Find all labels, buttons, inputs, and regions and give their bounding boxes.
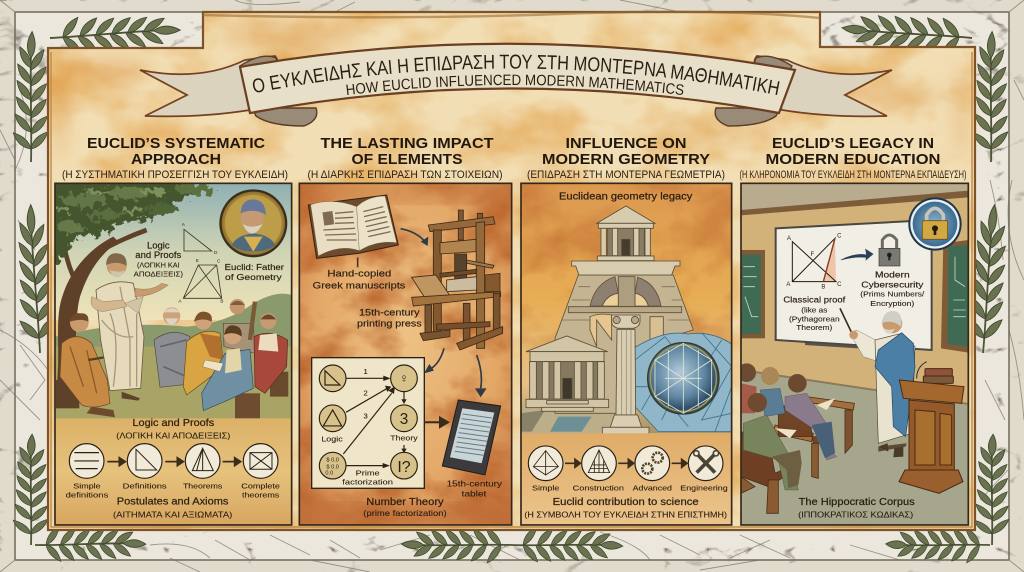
- subheading: postulates and axioms: [113, 497, 232, 519]
- arrow: proof to cybersecurity: [841, 249, 873, 260]
- icon: pyramid: [528, 446, 563, 481]
- flow diagram: simple to engineering: [528, 446, 728, 493]
- flow diagram: definitions to theorems: definitions: [66, 491, 109, 500]
- label: tablet: [447, 480, 502, 496]
- heading: lasting impact of Elements: (Η ΔΙΑΡΚΗΣ ΕΠΙΔΡΑΣΗ ΤΩΝ ΣΤΟΙΧΕΙΩΝ): [308, 169, 502, 181]
- number theory diagram box: 3: [364, 412, 368, 421]
- student desks and chairs: [741, 397, 854, 513]
- number theory diagram box: 1: [364, 367, 368, 376]
- number theory diagram box: 0.0: [325, 471, 333, 477]
- ribbon folds: [240, 56, 792, 126]
- subheading: logic and proofs: (ΛΟΓΙΚΗ ΚΑΙ ΑΠΟΔΕΙΞΕΙΣ): [116, 430, 230, 440]
- icon: gears: [635, 446, 670, 481]
- ribbon main band: [240, 44, 795, 113]
- heading: influence on modern geometry: INFLUENCE ON: [566, 135, 686, 152]
- arrow: [107, 458, 125, 466]
- whiteboard: [776, 220, 932, 350]
- geometry sketch: triangle and quadrilateral: [178, 222, 224, 303]
- subheading: contribution to science: [524, 497, 727, 519]
- heading: legacy in modern education: [740, 135, 966, 181]
- seated elder in grey: [154, 307, 191, 387]
- Euclid standing figure: [91, 253, 168, 401]
- label: tablet: 15th-century: [447, 479, 503, 489]
- stone pyramid structure: [555, 275, 693, 413]
- label: Hippocratic Corpus: (ΙΠΠΟΚΡΑΤΙΚΟΣ ΚΩΔΙΚΑΣ): [798, 510, 914, 519]
- number theory diagram box: ♀: [399, 372, 409, 386]
- number theory diagram box: 2: [364, 388, 368, 397]
- heading: influence on modern geometry: MODERN GEOMETRY: [542, 151, 710, 168]
- panel: lasting impact of Elements: [299, 183, 512, 525]
- arrow: [618, 459, 634, 467]
- geometry sketch: triangle and quadrilateral: A: [178, 298, 182, 303]
- arrow head: [475, 388, 487, 397]
- arrow: press to tablet: [477, 355, 481, 388]
- flow diagram: definitions to theorems: theorems: [242, 491, 280, 500]
- arrow head: [424, 364, 434, 373]
- proof diagram: A: [786, 282, 790, 288]
- seated student in red: [254, 313, 288, 397]
- central ionic column: [602, 315, 649, 437]
- heading: influence on modern geometry: (ΕΠΙΔΡΑΣΗ ΣΤΗ ΜΟΝΤΕΡΝΑ ΓΕΩΜΕΤΡΙΑ): [527, 169, 725, 181]
- icon: printing press: [412, 210, 503, 350]
- flow diagram: simple to engineering: Advanced: [633, 484, 672, 493]
- label: Euclidean geometry legacy: Euclidean geometry legacy: [559, 191, 692, 202]
- heading: Euclid's systematic approach: (Η ΣΥΣΤΗΜΑΤΙΚΗ ΠΡΟΣΕΓΓΙΣΗ ΤΟΥ ΕΥΚΛΕΙΔΗ): [62, 169, 288, 181]
- number theory diagram box: Logic: [321, 435, 343, 444]
- proof diagram: [786, 233, 842, 291]
- icon: Euclid portrait medallion: [219, 189, 287, 257]
- label: classical proof: (like as: [801, 306, 828, 315]
- olive branch: left side: [9, 203, 59, 354]
- proof diagram: A: [787, 236, 791, 242]
- label: number theory: [363, 497, 447, 518]
- left chalkboard: [738, 250, 765, 338]
- olive branch: bottom centre right: [512, 525, 623, 564]
- number theory diagram box: 3: [400, 411, 408, 428]
- banner title: Ο ΕΥΚΛΕΙΔΗΣ ΚΑΙ Η ΕΠΙΔΡΑΣΗ ΤΟΥ ΣΤΗ ΜΟΝΤΕΡΝΑ ΜΑΘΗΜΑΤΙΚΗ: [252, 54, 780, 95]
- label: classical proof: Classical proof: [783, 295, 846, 305]
- number theory diagram box: Prime: [356, 469, 380, 478]
- arrow: manuscript to press: [401, 229, 425, 242]
- label: printing press: [357, 307, 422, 329]
- arrow: press to number theory: [430, 348, 444, 369]
- arrow: [223, 458, 241, 466]
- icon: right triangle: [127, 444, 162, 478]
- banner subtitle: HOW EUCLID INFLUENCED MODERN MATHEMATICS: [346, 74, 684, 95]
- panel: Euclid teaching scene: [50, 180, 292, 525]
- label: number theory: Number Theory: [366, 497, 445, 508]
- subheading: postulates and axioms: Postulates and Axioms: [117, 497, 228, 508]
- lower left temple: [526, 336, 609, 411]
- label: hand-copied manuscripts: [313, 269, 406, 290]
- heading: influence on modern geometry: [527, 135, 725, 181]
- label: modern cybersecurity: (Prims Numbers/: [860, 292, 924, 299]
- olive branch: bottom left corner: [11, 434, 146, 564]
- number theory diagram box: [312, 358, 424, 488]
- icon: gold padlock medallion: [908, 197, 962, 251]
- label: Euclid father of geometry: Euclid: Father: [225, 262, 284, 272]
- label: Hippocratic Corpus: The Hippocratic Corpus: [799, 497, 915, 508]
- arrow: [672, 459, 687, 467]
- subheading: logic and proofs: Logic and Proofs: [132, 418, 214, 429]
- subheading: logic and proofs: [116, 418, 230, 440]
- right chalkboard: [941, 240, 968, 353]
- heading: lasting impact of Elements: [308, 135, 502, 181]
- geometry sketch: triangle and quadrilateral: C: [217, 259, 221, 264]
- icon: grid pyramid: [582, 446, 616, 481]
- olive branch: right side: [963, 203, 1012, 354]
- flow diagram: simple to engineering: Simple: [532, 484, 559, 493]
- heading: Euclid's systematic approach: EUCLID’S SYSTEMATIC: [87, 135, 265, 152]
- flow diagram: definitions to theorems: Simple: [73, 481, 101, 490]
- number theory diagram box: $ 0.0: [326, 464, 339, 470]
- arrow: [565, 459, 580, 467]
- back row student left: [737, 363, 757, 413]
- proof diagram: F: [810, 252, 814, 258]
- subheading: contribution to science: (Η ΣΥΜΒΟΛΗ ΤΟΥ ΕΥΚΛΕΙΔΗ ΣΤΗΝ ΕΠΙΣΤΗΜΗ): [524, 509, 727, 519]
- student in green shirt: [743, 393, 802, 490]
- label: logic and proofs: [134, 240, 183, 279]
- student in purple shirt: [785, 374, 837, 460]
- teacher figure: [840, 308, 915, 457]
- icon: crossed tools: [688, 446, 723, 481]
- subheading: postulates and axioms: (ΑΙΤΗΜΑΤΑ ΚΑΙ ΑΞΙΩΜΑΤΑ): [113, 509, 232, 519]
- ribbon left tail: [140, 56, 278, 116]
- flow diagram: definitions to theorems: Complete: [241, 481, 280, 490]
- arrow head: [421, 237, 428, 246]
- label: logic and proofs: ΑΠΟΔΕΙΞΕΙΣ): [134, 272, 183, 279]
- icon: rectangle with diagonals: [243, 444, 278, 478]
- label: tablet: tablet: [462, 489, 487, 499]
- title banner ribbon: [140, 42, 892, 127]
- lectern: [899, 362, 964, 493]
- seated student in orange: [56, 313, 115, 417]
- proof diagram: B: [821, 285, 825, 291]
- geometry sketch: triangle and quadrilateral: E: [196, 258, 199, 263]
- flow diagram: definitions to theorems: Definitions: [123, 481, 167, 490]
- olive branch: top right corner: [840, 9, 1010, 162]
- number theory diagram box: Theory: [390, 434, 418, 443]
- flow diagram: simple to engineering: Construction: [573, 484, 624, 493]
- label: Euclid father of geometry: of Geometry: [225, 272, 282, 282]
- heading: Euclid's systematic approach: [62, 135, 288, 181]
- label: Hippocratic Corpus: [798, 497, 915, 519]
- blue geometric mesh surface: [635, 333, 732, 432]
- icon: geodesic sphere: [648, 343, 719, 414]
- label: logic and proofs: (ΛΟΓΙΚΗ ΚΑΙ: [137, 262, 180, 269]
- label: modern cybersecurity: [860, 269, 924, 308]
- icon: open manuscript book: [308, 195, 398, 267]
- flow diagram: definitions to theorems: Theorems: [183, 481, 223, 490]
- panel 3 caption band: [521, 433, 732, 525]
- label: classical proof: [783, 295, 846, 332]
- icon: e-reader tablet: [442, 400, 501, 475]
- heading: legacy in modern education: EUCLID’S LEGACY IN: [772, 135, 934, 152]
- subheading: contribution to science: Euclid contribution to science: [553, 497, 699, 508]
- olive branch: bottom centre left: [401, 526, 512, 565]
- olive branch: top left corner: [11, 7, 181, 162]
- label: classical proof: Theorem): [796, 323, 832, 332]
- label: hand-copied manuscripts: Hand-copied: [327, 269, 391, 279]
- label: logic and proofs: and Proofs: [135, 250, 182, 260]
- heading: Euclid's systematic approach: APPROACH: [131, 151, 221, 168]
- proof diagram: C: [837, 282, 842, 288]
- flow diagram: simple to engineering: Engineering: [680, 484, 728, 493]
- heading: lasting impact of Elements: THE LASTING IMPACT: [320, 135, 494, 152]
- icon: padlock on board: [879, 235, 900, 266]
- label: hand-copied manuscripts: Greek manuscripts: [313, 280, 406, 290]
- label: classical proof: (Pythagorean: [789, 314, 840, 323]
- panel: influence on modern geometry: [521, 183, 732, 525]
- icon: triangle with altitude: [185, 444, 220, 478]
- number theory diagram box: $ 0.0: [326, 458, 339, 464]
- seated student in blue: [202, 325, 260, 418]
- label: Euclid father of geometry: [225, 262, 284, 282]
- olive branch: bottom right corner: [886, 434, 1011, 565]
- flow diagram: definitions to theorems: [66, 444, 280, 500]
- label: printing press: printing press: [357, 319, 422, 329]
- ribbon right tail: [754, 56, 892, 116]
- top temple: [572, 206, 680, 275]
- number theory diagram box: factorization: [342, 478, 393, 487]
- icon: lines: [69, 444, 104, 478]
- heading: legacy in modern education: MODERN EDUCATION: [766, 151, 940, 168]
- label: printing press: 15th-century: [359, 307, 420, 317]
- seated student in yellow: [183, 312, 224, 395]
- heading: lasting impact of Elements: OF ELEMENTS: [352, 151, 462, 168]
- label: modern cybersecurity: Modern: [875, 269, 910, 279]
- arrow: diagram to tablet: [424, 418, 448, 427]
- label: modern cybersecurity: Cybersecurity: [861, 279, 924, 289]
- panel: modern classroom: [737, 183, 968, 525]
- proof diagram: C: [837, 233, 842, 239]
- floor tiles: [522, 406, 616, 433]
- label: number theory: (prime factorization): [363, 509, 447, 518]
- geometry sketch: triangle and quadrilateral: D: [214, 250, 218, 255]
- label: logic and proofs: Logic: [147, 240, 170, 250]
- tree: [50, 180, 213, 393]
- standing figure at back: [223, 299, 255, 353]
- geometry sketch: triangle and quadrilateral: A: [182, 222, 186, 227]
- label: modern cybersecurity: Encryption): [870, 301, 914, 308]
- geometry sketch: triangle and quadrilateral: B: [220, 298, 224, 303]
- arrow: [165, 458, 183, 466]
- back row student centre: [760, 367, 785, 417]
- number theory diagram box: Ӏ?: [397, 459, 411, 476]
